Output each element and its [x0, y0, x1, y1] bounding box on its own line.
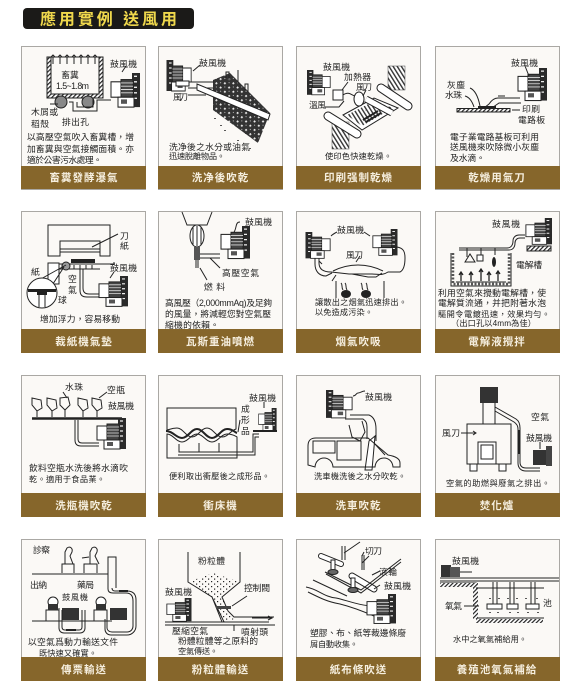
diagram: printing rollers: 風刀 [356, 82, 372, 92]
panel: 畜糞發酵瀑氣: 畜糞發酵瀑氣 [50, 171, 118, 184]
diagram: manure tank and blower: 木屑或 [31, 106, 58, 117]
diagram: manure tank and blower: 鼓風機 [110, 58, 137, 69]
diagram: manure tank and blower: 1.5~1.8m [56, 81, 89, 91]
description: 電子業電路基板可利用 [450, 131, 539, 142]
diagram: powder hopper [165, 552, 275, 637]
description: 飲料空瓶水洗後將水滴吹 [29, 462, 128, 473]
diagram: rack and air knife: 鼓風機 [199, 57, 226, 68]
panel: 洗瓶機吹乾: 洗瓶機吹乾 [55, 499, 113, 512]
description: 以高壓空氣吹入畜糞槽，增 [27, 131, 134, 142]
diagram: document pneumatic tube: 藥局 [77, 579, 94, 590]
panel: 傳票輸送: 傳票輸送 [61, 663, 107, 676]
diagram: stamping press: 形 [241, 415, 250, 425]
panel: 乾燥用氣刀: 乾燥用氣刀 [468, 171, 526, 184]
diagram: paper cutter air cushion [27, 225, 137, 308]
diagram: circuit board air knife: 水珠 [445, 89, 462, 100]
diagram: car wash dryer [308, 390, 400, 470]
description: 高風壓（2,000mmAq)及足夠 [165, 297, 272, 308]
panel: 洗瓶機吹乾 [21, 376, 146, 517]
diagram: stamping press: 品 [241, 426, 250, 436]
diagram: burner nozzle [182, 212, 272, 292]
diagram: paper cutter air cushion: 紙 [31, 266, 40, 277]
panel: 烟氣吹吸 [296, 212, 421, 353]
diagram: stamping press: 鼓風機 [249, 392, 276, 403]
diagram: circuit board air knife [445, 57, 547, 125]
description: 利用空氣來攪動電解槽，使 [438, 287, 546, 298]
panel: 電解液攪拌: 驅開令電鍍迅速，效果均勻。 [438, 309, 550, 319]
diagram: powder hopper: 鼓風機 [165, 586, 192, 597]
panel: 紙布條吹送: 屑自動收集。 [310, 639, 358, 649]
panel: 粉粒體輸送 [158, 540, 283, 681]
diagram: fume hood with blowers: 鼓風機 [337, 224, 364, 235]
diagram: incinerator: 風刀 [442, 428, 460, 438]
description: 塑膠、布、紙等裁邊條廢 [310, 627, 406, 638]
diagram: powder hopper: 壓縮空氣 [172, 625, 208, 636]
diagram: aquaculture aeration: 池 [543, 597, 552, 608]
diagram: document pneumatic tube: 診察 [33, 544, 50, 555]
panel: 裁紙機氣墊 [21, 212, 146, 353]
panel: 洗淨後吹乾: 迅速脫離物品。 [169, 151, 225, 161]
panel: 乾燥用氣刀: 送風機來吹除微小灰塵 [450, 141, 539, 152]
panel: 畜糞發酵瀑氣 [21, 46, 146, 190]
diagram: printing rollers: 加熱器 [344, 71, 371, 82]
diagram: aquaculture aeration: 氧氣 [445, 600, 462, 611]
diagram: manure tank and blower: 排出孔 [62, 116, 89, 127]
diagram: fume hood with blowers [306, 224, 405, 299]
diagram: powder hopper: 噴射頭 [241, 626, 268, 637]
panel: 瓦斯重油噴燃: 縮機的依賴。 [165, 319, 219, 330]
description: 洗車機洗後之水分吹乾。 [314, 471, 406, 481]
panel: 烟氣吹吸: 讓散出之烟氣迅速排出。 [315, 297, 407, 307]
panel: 養殖池氧氣補給 [435, 540, 560, 681]
diagram: paper trim: 滾輪 [379, 566, 397, 577]
diagram: paper cutter air cushion: 刀 [120, 231, 129, 241]
panel: 瓦斯重油噴燃: 瓦斯重油噴燃 [186, 335, 255, 348]
panel: 電解液攪拌 [435, 212, 560, 353]
diagram: circuit board air knife: 印刷 [522, 103, 540, 114]
panel: 洗車吹乾 [296, 376, 421, 517]
panel: 電解液攪拌: 電解液攪拌 [468, 335, 526, 348]
diagram: paper cutter air cushion: 空 [68, 273, 77, 284]
diagram: bottle washer [32, 381, 134, 449]
panel: 粉粒體輸送: 空氣傳送。 [178, 646, 218, 656]
panel: 紙布條吹送: 紙布條吹送 [330, 663, 387, 676]
diagram: paper cutter air cushion: 氣 [68, 284, 77, 295]
diagram: paper trim [306, 542, 411, 623]
diagram: incinerator: 鼓風機 [526, 432, 552, 443]
panel: 乾燥用氣刀: 及水滴。 [450, 152, 485, 163]
diagram: printing rollers: 溫風 [309, 100, 326, 110]
diagram: electrolysis tank: 電解槽 [516, 259, 542, 270]
diagram: document pneumatic tube: 鼓風機 [62, 592, 88, 602]
description: 增加浮力，容易移動 [40, 313, 120, 324]
diagram: manure tank and blower [31, 55, 140, 129]
diagram: burner nozzle: 燃料 [204, 281, 225, 292]
diagram: manure tank and blower: 稻殼 [31, 118, 49, 129]
diagram: paper trim: 切刀 [365, 546, 382, 556]
diagram: powder hopper: 控制閥 [244, 582, 270, 593]
panel: 電解液攪拌: 電解質流通，并把附著水泡 [438, 297, 546, 308]
diagram: burner nozzle: 鼓風機 [245, 216, 272, 227]
diagram: incinerator: 空氣 [531, 411, 549, 422]
diagram: aquaculture aeration [440, 555, 559, 623]
diagram: paper cutter air cushion: 球 [58, 294, 67, 305]
description: 水中之氧氣補給用。 [453, 634, 527, 644]
panel: 養殖池氧氣補給: 養殖池氧氣補給 [457, 663, 537, 676]
panel: 洗淨後吹乾 [158, 46, 283, 190]
description: 空氣的助燃與廢氣之排出。 [446, 478, 550, 488]
panel: 傳票輸送: 以空氣爲動力輸送文件 [28, 636, 118, 647]
description: 粉體粒體等之原料的 [178, 635, 258, 646]
panel: 畜糞發酵瀑氣: 加畜糞與空氣接觸面積。亦 [27, 143, 134, 154]
diagram: incinerator [442, 387, 552, 471]
diagram: circuit board air knife: 鼓風機 [511, 57, 538, 68]
description: 洗净後之水分或油氣 [169, 141, 250, 152]
panel: 瓦斯重油噴燃: 的風量，將減輕您對空氣壓 [165, 308, 271, 319]
diagram: rack and air knife: 風刀 [173, 92, 188, 102]
diagram: electrolysis tank [451, 218, 552, 286]
diagram: bottle washer: 水珠 [65, 381, 83, 392]
diagram: aquaculture aeration: 鼓風機 [452, 555, 479, 566]
diagram: electrolysis tank: 鼓風機 [492, 218, 520, 229]
panel: 衝床機 [158, 376, 283, 517]
diagram: bottle washer: 鼓風機 [108, 400, 134, 411]
diagram: printing rollers: 鼓風機 [323, 61, 350, 72]
panel: 粉粒體輸送: 粉粒體輸送 [192, 663, 249, 676]
panel: 傳票輸送 [21, 540, 146, 681]
panel: 電解液攪拌: （出口孔以4mm為佳） [451, 318, 536, 328]
panel: 洗淨後吹乾: 洗净後吹乾 [192, 171, 249, 184]
panel: 乾燥用氣刀 [435, 46, 560, 190]
diagram: circuit board air knife: 電路板 [518, 114, 545, 125]
panel: 裁紙機氣墊: 裁紙機氣墊 [55, 335, 113, 348]
panel: 傳票輸送: 既快速又確實。 [39, 648, 97, 658]
diagram: document pneumatic tube [30, 544, 136, 635]
panel: 焚化爐: 焚化爐 [480, 499, 514, 512]
diagram: circuit board air knife: 灰塵 [447, 79, 465, 90]
panel: 烟氣吹吸: 以免造成污染。 [315, 307, 373, 317]
diagram: paper trim: 鼓風機 [384, 580, 411, 591]
description [26, 636, 120, 656]
panel: 紙布條吹送 [296, 540, 421, 681]
diagram: powder hopper: 粉粒體 [198, 555, 225, 566]
diagram: stamping press [166, 392, 277, 458]
diagram: paper cutter air cushion: 紙 [120, 240, 129, 251]
panel: 洗瓶機吹乾: 乾。適用于食品業。 [29, 474, 105, 484]
diagram: bottle washer: 空瓶 [107, 384, 125, 395]
diagram: stamping press: 成 [241, 403, 250, 414]
panel: 烟氣吹吸: 烟氣吹吸 [336, 335, 382, 348]
diagram: printing rollers [307, 61, 408, 149]
title: 應用實例 送風用 [40, 10, 177, 28]
panel: 衝床機: 衝床機 [203, 499, 238, 512]
description [312, 298, 410, 318]
description: 使印色快速乾燥。 [325, 151, 392, 161]
diagram: burner nozzle: 高壓空氣 [222, 267, 259, 278]
title [23, 8, 194, 29]
diagram: paper cutter air cushion: 鼓風機 [110, 262, 137, 273]
diagram: fume hood with blowers: 風刀 [346, 250, 363, 260]
panel: 印刷強制乾燥: 印刷强制乾燥 [324, 171, 393, 184]
diagram: rack and air knife [166, 57, 270, 149]
panel: 畜糞發酵瀑氣: 適於公害污水處理。 [27, 154, 102, 165]
panel: 洗車吹乾: 洗車吹乾 [336, 499, 382, 512]
diagram: manure tank and blower: 畜糞 [61, 69, 79, 80]
diagram: document pneumatic tube: 出納 [30, 579, 47, 590]
diagram: car wash dryer: 鼓風機 [365, 391, 392, 402]
panel: 瓦斯重油噴燃 [158, 212, 283, 353]
description: 便利取出衝壓後之成形品。 [169, 471, 270, 481]
panel: 焚化爐 [435, 376, 560, 517]
panel: 印刷強制乾燥 [296, 46, 421, 190]
